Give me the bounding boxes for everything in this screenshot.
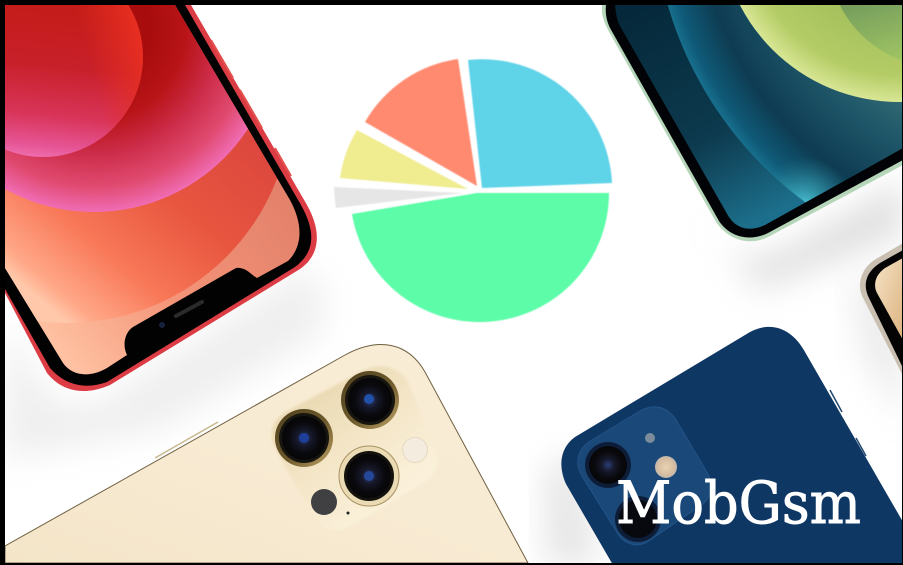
- blue lens: top: [585, 442, 631, 488]
- red phone frame: [5, 5, 317, 391]
- red phone front camera: [159, 322, 165, 328]
- microphone dot: [346, 512, 350, 514]
- green phone black bezel: [606, 5, 903, 237]
- blue phone body: [561, 327, 903, 565]
- gold phone body: [5, 345, 528, 563]
- blue microphone: [645, 433, 655, 443]
- gold phone black bezel: [866, 250, 903, 368]
- lens: bottom: [339, 446, 399, 506]
- watermark: MobGsm: MobGsm: [616, 469, 861, 537]
- gold phone frame: [860, 243, 903, 376]
- phone: green iPhone front: [602, 5, 902, 242]
- blue lens: bottom: [615, 496, 661, 542]
- red phone side buttons: [211, 40, 291, 176]
- gold phone side button: [155, 422, 218, 458]
- soft phone shadows: [5, 180, 903, 565]
- gold phone screen: [875, 258, 903, 340]
- blue flash: [655, 456, 677, 478]
- phone: gold iPhone front partial: [860, 243, 903, 376]
- flash: [402, 438, 428, 462]
- slice: salmon: [365, 59, 477, 186]
- red phone speaker: [176, 302, 202, 316]
- slice: blue: [468, 59, 612, 188]
- red phone wallpaper: [5, 5, 300, 374]
- lidar: [311, 489, 337, 515]
- slice: green: [352, 193, 609, 322]
- phone: red iPhone front: [0, 0, 320, 391]
- pie chart: [334, 59, 612, 322]
- camera module: [271, 366, 430, 496]
- phone: blue iPhone back: [561, 327, 903, 565]
- phone: gold iPhone back: [5, 345, 528, 563]
- slice: grey: [334, 187, 463, 208]
- red phone black bezel: [5, 5, 311, 386]
- blue camera module: [578, 407, 711, 545]
- green phone wallpaper: [615, 5, 902, 229]
- lens: left: [275, 409, 333, 467]
- green phone frame: [602, 5, 903, 241]
- blue phone side buttons: [830, 390, 866, 456]
- lens: top: [341, 371, 399, 429]
- slice: yellow: [340, 130, 468, 189]
